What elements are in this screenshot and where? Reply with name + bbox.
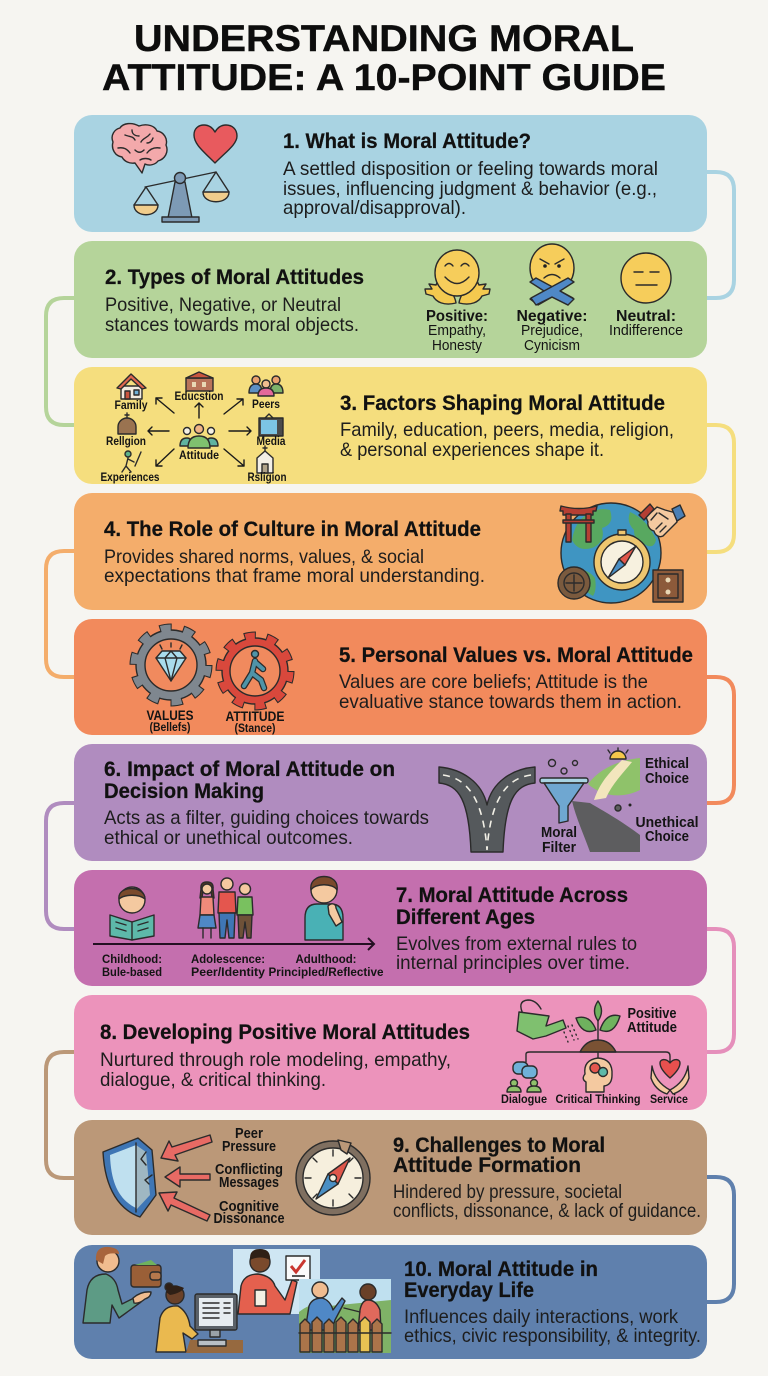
- icon: family house: [117, 374, 146, 399]
- labels: Service: [650, 1092, 688, 1106]
- text block 2: stances towards moral objects.: [105, 314, 359, 336]
- heading 6: 6. Impact of Moral Attitude on: [104, 757, 395, 781]
- label: positive: [426, 308, 488, 354]
- label: neutral: Neutral:: [616, 308, 676, 325]
- text block 1: A settled disposition or feeling towards moral: [283, 158, 658, 180]
- icon: sprouting plant: [576, 1001, 620, 1052]
- coin: [558, 567, 590, 599]
- text block 10: [404, 1306, 701, 1347]
- stage label: adulthood: Adulthood:: [296, 952, 356, 966]
- title: [102, 18, 666, 98]
- icon: filter funnel: [540, 760, 588, 823]
- text block 9: conflicts, dissonance, & lack of guidance.: [393, 1200, 701, 1222]
- icon: balance scale: [134, 172, 229, 222]
- text block 9: Hindered by pressure, societal: [393, 1181, 622, 1203]
- connectors between panels: [46, 172, 734, 1302]
- icon: ethical path: [588, 748, 640, 800]
- gear labels: (Stance): [234, 721, 276, 735]
- icon: religion dome: [118, 413, 136, 434]
- text block 8: dialogue, & critical thinking.: [100, 1069, 326, 1091]
- icon: child reading: [110, 887, 154, 940]
- icon: brain: [112, 124, 167, 173]
- tree connector: [526, 1052, 670, 1062]
- icon: unethical path: [572, 801, 640, 852]
- icon: peers: [249, 376, 283, 396]
- heading 8: 8. Developing Positive Moral Attitudes: [100, 1020, 470, 1044]
- label: neutral: [609, 308, 683, 339]
- icon: forked road: [439, 767, 535, 852]
- heading 9: [393, 1133, 605, 1177]
- factor labels: Media: [256, 434, 286, 448]
- gear labels: [146, 707, 284, 735]
- icon: teens group: [198, 878, 253, 938]
- labels: ethical choice: [645, 756, 689, 787]
- heading 10: 10. Moral Attitude in: [404, 1257, 598, 1281]
- handshake: [639, 504, 685, 537]
- text block 4: expectations that frame moral understanding.: [104, 565, 485, 587]
- pressure labels: Dissonance: [214, 1211, 284, 1227]
- text block 5: Values are core beliefs; Attitude is the: [339, 671, 648, 693]
- label: neutral: Indifference: [609, 323, 683, 339]
- icon: school: [186, 372, 213, 391]
- labels: ethical choice: Choice: [645, 771, 689, 787]
- panel 5: personal values vs moral attitude: [74, 619, 707, 735]
- labels: Attitude: [627, 1020, 677, 1036]
- heading 10: Everyday Life: [404, 1278, 534, 1302]
- labels: [501, 1006, 688, 1106]
- factor labels: Rellgion: [106, 434, 146, 448]
- attitude gear: [220, 636, 290, 706]
- gear labels: ATTITUDE: [226, 708, 284, 724]
- panel 4: role of culture: [74, 493, 707, 610]
- panel 2: types of moral attitudes: [74, 241, 707, 358]
- icon: church: [257, 446, 273, 473]
- panel 7: across different ages: [74, 870, 707, 986]
- pressure labels: Cognitive: [219, 1199, 279, 1215]
- text block 7: [396, 933, 637, 974]
- text block 1: approval/disapproval).: [283, 197, 466, 219]
- icon: critical thinking head: [583, 1058, 612, 1092]
- labels: Dialogue: [501, 1092, 547, 1106]
- heading 1: 1. What is Moral Attitude?: [283, 129, 531, 153]
- icon: cracked shield: [103, 1138, 156, 1217]
- torii gate: [560, 506, 597, 542]
- rug: [653, 570, 683, 602]
- stage label: adolescence: Peer/Identity: [191, 965, 265, 979]
- text block 7: Evolves from external rules to: [396, 933, 637, 955]
- text block 6: ethical or unethical outcomes.: [104, 827, 353, 849]
- heading 10: [404, 1257, 598, 1302]
- labels: unethical choice: Choice: [645, 829, 689, 845]
- icon: media tv: [259, 414, 283, 436]
- icon: heart: [194, 125, 237, 163]
- diagram: factors around attitude: [100, 372, 286, 484]
- icon: globe with culture symbols: [558, 503, 685, 603]
- globe: [561, 503, 661, 603]
- text block 2: [105, 294, 359, 336]
- labels: moral filter: Filter: [542, 840, 576, 856]
- heading 6: [104, 757, 395, 803]
- heading 4: 4. The Role of Culture in Moral Attitude: [104, 517, 481, 541]
- label: negative: Prejudice,: [521, 323, 583, 339]
- scene: honest vote card: [233, 1249, 320, 1314]
- stage label: adulthood: Principled/Reflective: [268, 965, 384, 979]
- text block 3: Family, education, peers, media, religion,: [340, 419, 674, 441]
- icon: positive face: [425, 250, 490, 304]
- icon: watering can: [517, 1000, 578, 1042]
- icon: neutral face: [621, 253, 671, 303]
- panel 1: what is moral attitude: [74, 115, 707, 232]
- text block 8: [100, 1049, 451, 1091]
- icon: negative face: [530, 244, 574, 305]
- text block 1: [283, 158, 658, 219]
- stage label: adolescence: [191, 952, 265, 979]
- text block 4: Provides shared norms, values, & social: [104, 546, 424, 568]
- icon: adult thinking: [305, 876, 343, 940]
- factor labels: Attitude: [179, 448, 219, 462]
- factor labels: Peers: [252, 397, 280, 411]
- text block 2: Positive, Negative, or Neutral: [105, 294, 341, 316]
- heading 9: 9. Challenges to Moral: [393, 1133, 605, 1157]
- factor labels: Rsligion: [248, 470, 286, 484]
- icon: attitude people: [180, 424, 218, 448]
- icon: gears: [134, 628, 290, 735]
- heading 7: [396, 883, 628, 929]
- factor labels: Educstion: [174, 389, 224, 403]
- heading 7: Different Ages: [396, 905, 535, 929]
- values gear: [134, 628, 208, 702]
- text block 10: ethics, civic responsibility, & integrity.: [404, 1325, 701, 1347]
- compass: [594, 530, 650, 590]
- text block 5: [339, 671, 682, 713]
- labels: Positive: [628, 1006, 676, 1022]
- scene: neighbours at fence: [299, 1279, 391, 1353]
- fence: [299, 1317, 391, 1352]
- heading 7: 7. Moral Attitude Across: [396, 883, 628, 907]
- labels: Critical Thinking: [556, 1092, 640, 1106]
- panel 3: factors shaping moral attitude: [74, 367, 707, 484]
- gear labels: VALUES: [146, 707, 194, 723]
- pressure labels: Peer: [235, 1126, 263, 1142]
- scene: woman at computer: [156, 1283, 243, 1353]
- stage label: adolescence: Adolescence:: [191, 952, 265, 966]
- text block 4: [104, 546, 485, 587]
- pressure labels: Conflicting: [215, 1162, 283, 1178]
- arrows: [148, 398, 251, 466]
- labels: moral filter: Moral: [541, 825, 577, 841]
- text block 8: Nurtured through role modeling, empathy,: [100, 1049, 451, 1071]
- heading 9: Attitude Formation: [393, 1153, 581, 1177]
- text block 1: issues, influencing judgment & behavior (e.g.,: [283, 178, 657, 200]
- label: negative: Negative:: [516, 308, 588, 325]
- label: positive: Empathy,: [428, 323, 486, 339]
- heading 3: 3. Factors Shaping Moral Attitude: [340, 391, 665, 415]
- text block 3: [340, 419, 674, 461]
- title: ATTITUDE: A 10-POINT GUIDE: [102, 57, 666, 98]
- heading 2: 2. Types of Moral Attitudes: [105, 265, 364, 289]
- text block 6: [104, 807, 429, 849]
- panel 10: everyday life: [74, 1245, 707, 1359]
- labels: moral filter: [541, 825, 577, 856]
- text block 7: internal principles over time.: [396, 952, 630, 974]
- labels: unethical choice: [636, 815, 698, 845]
- title: UNDERSTANDING MORAL: [134, 18, 634, 59]
- pressure labels: Messages: [219, 1175, 279, 1191]
- label: negative: Cynicism: [524, 338, 580, 354]
- stage label: childhood: [102, 952, 162, 979]
- panel 6: impact on decision making: [74, 744, 707, 861]
- gear labels: (Bellefs): [150, 720, 191, 734]
- text block 3: & personal experiences shape it.: [340, 439, 604, 461]
- factor labels: Family: [114, 398, 148, 412]
- heading 5: 5. Personal Values vs. Moral Attitude: [339, 643, 693, 667]
- text block 9: [393, 1181, 701, 1222]
- text block 6: Acts as a filter, guiding choices towards: [104, 807, 429, 829]
- panel 9: challenges: [74, 1120, 707, 1235]
- scene: returning a wallet: [83, 1247, 161, 1323]
- factor labels: [100, 389, 286, 484]
- icon: dialogue: [507, 1062, 541, 1092]
- pressure labels: [214, 1126, 284, 1227]
- icon: broken compass: [296, 1140, 370, 1215]
- label: positive: Honesty: [432, 338, 483, 354]
- timeline arrow: [93, 938, 374, 950]
- pressure labels: Pressure: [222, 1139, 276, 1155]
- labels: ethical choice: Ethical: [645, 756, 689, 772]
- factor labels: Experiences: [100, 470, 160, 484]
- labels: unethical choice: Unethical: [636, 815, 698, 831]
- text block 5: evaluative stance towards them in action.: [339, 691, 682, 713]
- text block 10: Influences daily interactions, work: [404, 1306, 678, 1328]
- heading 6: Decision Making: [104, 779, 264, 803]
- arrows: pressures: [159, 1135, 212, 1221]
- stage label: adulthood: [268, 952, 384, 979]
- icon: service hands with heart: [651, 1060, 689, 1094]
- icon: experiences walker: [122, 451, 141, 472]
- stage label: childhood: Childhood:: [102, 952, 162, 966]
- label: negative: [516, 308, 588, 354]
- stage label: childhood: Bule-based: [102, 965, 162, 979]
- panel 8: developing positive attitudes: [74, 995, 707, 1110]
- label: positive: Positive:: [426, 308, 488, 325]
